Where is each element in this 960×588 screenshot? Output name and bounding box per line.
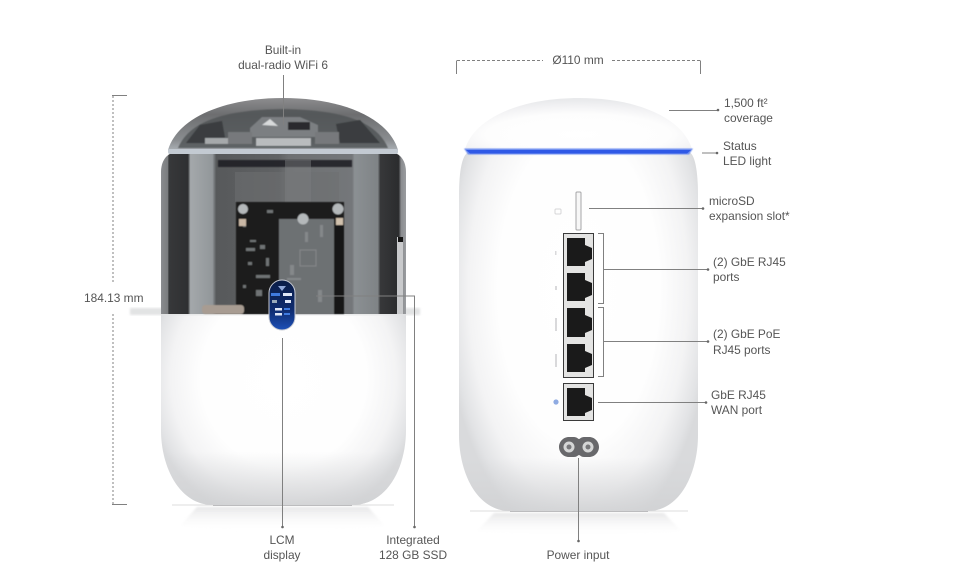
width dimension: Ø110 mm <box>552 53 604 67</box>
callout: LCM display: display <box>263 548 301 562</box>
callout: power input <box>547 458 610 562</box>
RJ45 port 1 <box>567 238 592 266</box>
callout: microSD <box>589 194 790 223</box>
callout: WAN: GbE RJ45 <box>711 388 766 402</box>
RJ45 port 3 <box>567 308 592 337</box>
callout: power input: Power input <box>547 548 610 562</box>
callout: SSD <box>316 296 447 562</box>
port number marks <box>555 251 557 367</box>
floor shadow <box>470 510 688 536</box>
callout: GbE RJ45 ports <box>598 234 786 304</box>
callout: WAN: WAN port <box>711 403 763 417</box>
RJ45 port 4 <box>567 344 592 372</box>
dome cap with antenna <box>168 98 398 154</box>
microSD slot <box>555 192 581 230</box>
callout: status LED <box>702 139 772 168</box>
callout: status LED: Status <box>723 139 757 153</box>
callout: PoE ports: RJ45 ports <box>713 343 771 357</box>
RJ45 port 2 <box>567 273 592 301</box>
callout: coverage: coverage <box>724 111 773 125</box>
panel: rear view router (right) <box>459 98 698 536</box>
WAN port <box>553 384 594 420</box>
soft band at cut line <box>130 308 420 315</box>
callout: PoE ports <box>598 308 780 376</box>
circuit board <box>202 202 344 314</box>
callout: GbE RJ45 ports: (2) GbE RJ45 <box>713 255 786 269</box>
callout: SSD: Integrated <box>386 533 440 547</box>
callout: microSD: microSD <box>709 194 755 208</box>
white lower body <box>161 300 406 505</box>
callout: GbE RJ45 ports: ports <box>713 270 739 284</box>
callout: status LED: LED light <box>723 154 772 168</box>
callout: WiFi: Built-in <box>265 43 301 57</box>
callout: WiFi <box>238 43 328 125</box>
callout: WAN <box>598 388 766 417</box>
cutaway dark body <box>161 152 406 314</box>
height dimension line <box>112 96 127 504</box>
floor shadow <box>172 504 394 531</box>
LCM screen <box>269 280 295 330</box>
label: height: 184.13 mm <box>84 291 144 305</box>
callout: PoE ports: (2) GbE PoE <box>713 327 780 341</box>
panel: cutaway router (left) <box>130 98 420 531</box>
power inlet <box>559 437 599 457</box>
callout: SSD: 128 GB SSD <box>379 548 447 562</box>
blue status LED <box>464 148 693 154</box>
callout: LCM display <box>263 338 301 562</box>
dome <box>465 98 692 149</box>
callout: WiFi: dual-radio WiFi 6 <box>238 58 328 72</box>
port block: four LAN ports <box>564 234 594 378</box>
body <box>459 152 698 511</box>
callout: coverage: 1,500 ft² <box>724 96 768 110</box>
callout: coverage <box>669 96 773 125</box>
callout: microSD: expansion slot* <box>709 209 790 223</box>
callout: LCM display: LCM <box>269 533 295 547</box>
